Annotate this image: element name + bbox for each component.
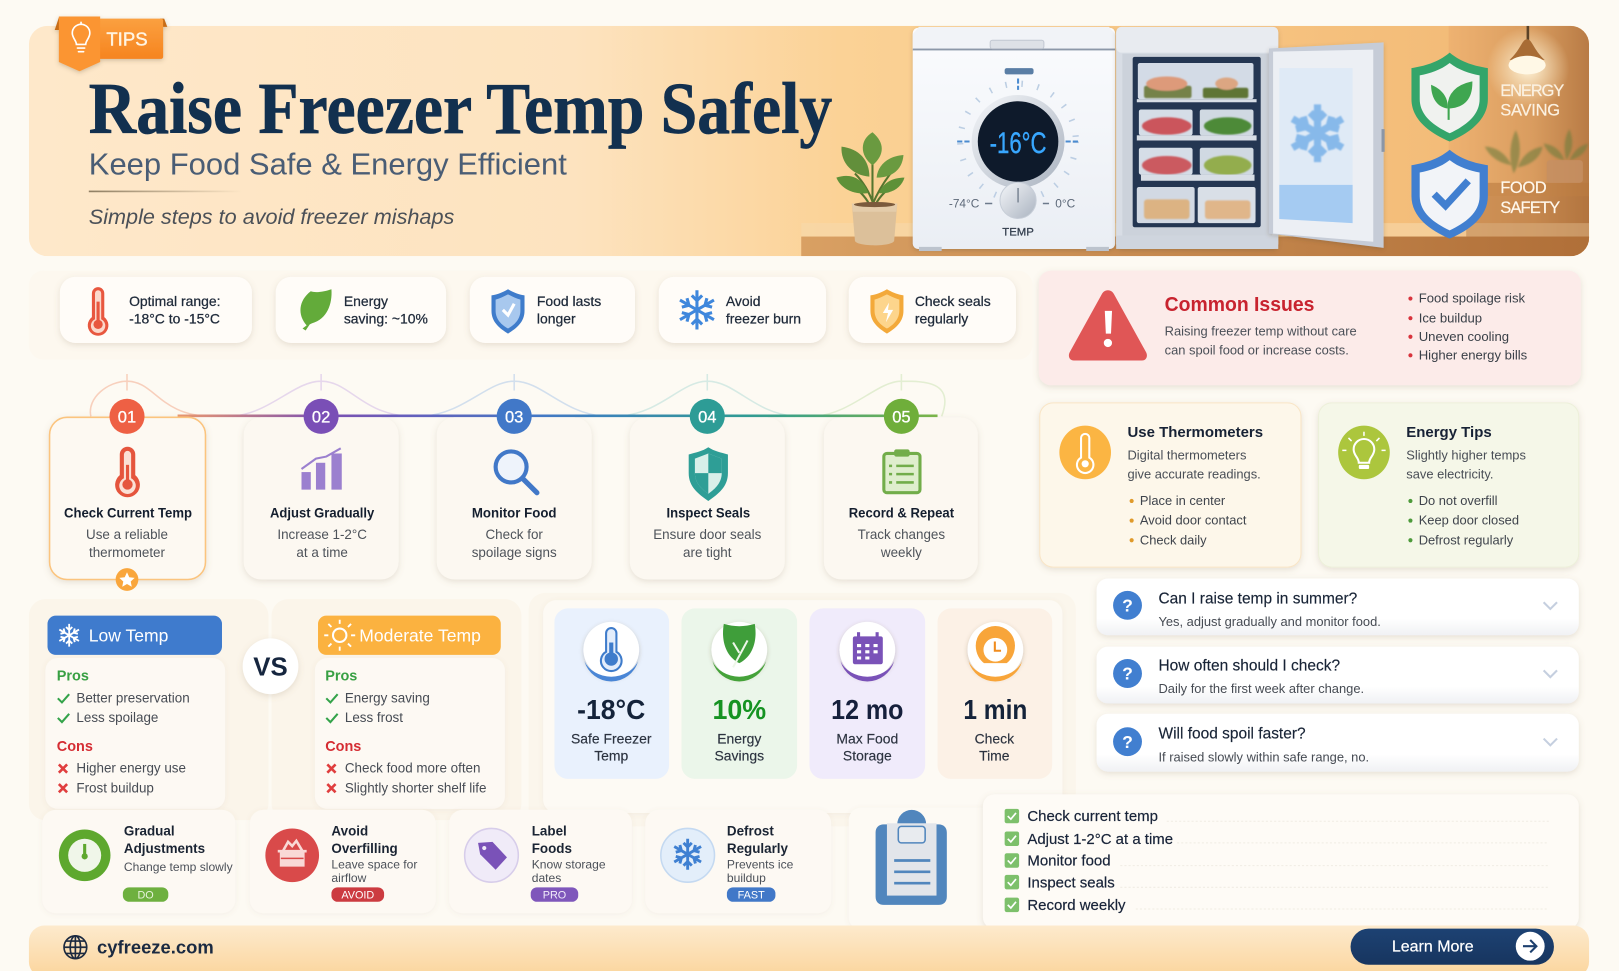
star badge — [116, 568, 138, 591]
fact: optimal range — [60, 277, 252, 343]
temp label: TEMP — [1002, 227, 1034, 239]
tagline: Simple steps to avoid freezer mishaps — [89, 204, 454, 229]
energy saving badge: SAVING — [1500, 101, 1560, 120]
step text: Inspect Seals — [666, 505, 750, 521]
stat value: 10% — [712, 694, 766, 725]
panel: checklist clipboard — [849, 808, 993, 930]
step 1 card: thermometer — [89, 545, 166, 560]
vs badge: VS — [253, 654, 288, 682]
shelf 3 — [1139, 148, 1193, 175]
icon: magnifier — [496, 451, 537, 493]
food safety label: FOOD — [1500, 178, 1547, 197]
step number: 02 — [312, 407, 330, 426]
tips ribbon badge — [55, 17, 167, 71]
panel: low vs moderate comparison — [29, 599, 521, 820]
shelf 4 — [1137, 187, 1195, 223]
low temp header — [47, 616, 222, 655]
energy saving badge — [1411, 53, 1564, 142]
stat: safe freezer temp — [554, 608, 669, 779]
issues description: Raising freezer temp without care — [1165, 324, 1357, 339]
stat label: Safe Freezer — [571, 731, 652, 747]
timeline curves — [90, 374, 945, 416]
icon: blue shield — [491, 289, 525, 334]
stat: max food storage — [810, 608, 925, 779]
card heading: Energy Tips — [1406, 424, 1492, 441]
step number: 01 — [118, 407, 136, 426]
step text: Monitor Food — [472, 505, 557, 521]
step text: Adjust Gradually — [270, 505, 375, 521]
issues description: can spoil food or increase costs. — [1165, 342, 1349, 357]
icon: arrow — [1516, 932, 1545, 961]
tag: fast — [727, 887, 775, 902]
moderate temp pros and cons: Slightly shorter shelf life — [345, 780, 486, 795]
step 5 card: weekly — [880, 545, 922, 560]
icon: light bulb circle — [1338, 426, 1390, 479]
moderate temp pros and cons: Energy saving — [345, 690, 430, 705]
card description: give accurate readings. — [1128, 466, 1261, 481]
tip: defrost regularly: Defrost — [727, 824, 774, 839]
faq item 1: ? — [1122, 596, 1133, 616]
moderate temp header: Moderate Temp — [359, 625, 481, 645]
stat label: Max Food — [836, 731, 898, 747]
issues heading: Common Issues — [1165, 293, 1314, 316]
panel: faq — [1097, 578, 1579, 772]
step 3 card: Check for — [486, 527, 543, 542]
icon: globe — [64, 936, 87, 959]
learn more button: Learn More — [1392, 938, 1474, 955]
panel: common issues — [1039, 271, 1581, 385]
shelf 1 — [1138, 63, 1253, 99]
faq item 3: Will food spoil faster? — [1158, 726, 1306, 743]
tip: avoid overfilling: airflow — [331, 871, 367, 885]
icon: basket — [265, 828, 319, 882]
tag: avoid: AVOID — [341, 890, 374, 902]
step 5 card — [824, 399, 978, 580]
step number — [690, 399, 725, 434]
vs badge — [243, 638, 298, 694]
step number: 04 — [698, 407, 716, 426]
faq item 2: How often should I check? — [1158, 657, 1340, 674]
dial ticks — [960, 84, 1076, 199]
moderate temp pros and cons: Pros — [325, 669, 357, 685]
faq item 1: Yes, adjust gradually and monitor food. — [1158, 614, 1381, 629]
faq item 2: ? — [1122, 664, 1133, 684]
tag: fast: FAST — [738, 890, 765, 902]
step 1 card — [50, 399, 205, 591]
stat value: -18°C — [577, 694, 645, 725]
tag: avoid — [331, 887, 384, 902]
fact: food lasts — [470, 277, 635, 343]
stat label: Temp — [594, 747, 629, 763]
step 2 card — [244, 399, 399, 580]
checklist items: Inspect seals — [1027, 874, 1115, 891]
icon: sun — [324, 620, 355, 651]
door snowflake — [1289, 104, 1346, 162]
tip: avoid overfilling: Leave space for — [331, 858, 417, 872]
moderate temp pros and cons: Check food more often — [345, 761, 480, 776]
faq item 1: Can I raise temp in summer? — [1158, 590, 1358, 607]
icon: leaf — [711, 622, 767, 681]
step 2 card: Increase 1-2°C — [277, 527, 367, 542]
icon: teal shield — [689, 447, 728, 501]
icon: green clipboard — [884, 449, 920, 493]
tip: avoid overfilling: Avoid — [331, 824, 368, 839]
energy saving label: ENERGY — [1500, 81, 1564, 100]
issues list: Higher energy bills — [1419, 347, 1528, 362]
panel: footer — [29, 926, 1589, 971]
issues list: Ice buildup — [1419, 310, 1482, 325]
icon: snowflake — [677, 290, 717, 330]
tip: gradual adjustments — [42, 810, 235, 913]
fact text: longer — [537, 310, 576, 326]
plant — [836, 132, 904, 245]
tag: do: DO — [137, 890, 154, 902]
low temp pros and cons: Cons — [57, 739, 93, 755]
stat label: Savings — [714, 747, 764, 763]
tip: defrost regularly: buildup — [727, 871, 766, 885]
tip: label foods: dates — [532, 871, 561, 885]
stat label: Energy — [717, 731, 761, 747]
tag: do — [123, 887, 168, 902]
tip: gradual adjustments: Gradual — [124, 824, 175, 839]
fact text: Check seals — [915, 293, 991, 309]
low temp pros and cons: Better preservation — [76, 690, 190, 705]
chest freezer with dial — [913, 27, 1115, 251]
icon: gauge — [59, 829, 110, 881]
card heading: Use Thermometers — [1128, 424, 1263, 441]
low temp pros and cons: Pros — [57, 669, 89, 685]
icon: blue check shield — [1411, 150, 1488, 239]
step 5 card: Track changes — [858, 527, 945, 542]
faq item 2 — [1097, 647, 1579, 703]
icon: tag — [465, 828, 518, 882]
card list: Defrost regularly — [1419, 532, 1514, 547]
step 1 card: Use a reliable — [86, 527, 168, 542]
fact text: Avoid — [726, 293, 760, 309]
tip: defrost regularly — [645, 810, 831, 913]
tip: label foods: Foods — [532, 841, 572, 856]
fact text: saving: ~10% — [344, 310, 428, 326]
moderate temp pros and cons: Cons — [325, 739, 361, 755]
tip: label foods: Label — [532, 824, 567, 839]
fact text: regularly — [915, 310, 968, 326]
icon: leaf — [300, 289, 332, 331]
issues list — [1408, 291, 1528, 362]
fact: energy saving — [276, 277, 446, 343]
fact: avoid freezer burn — [659, 277, 826, 343]
icon: snowflake — [58, 624, 81, 647]
icon: clipboard — [876, 810, 947, 905]
card list: Check daily — [1140, 532, 1207, 547]
icon: snowflake — [661, 828, 715, 882]
tip: defrost regularly: Prevents ice — [727, 858, 794, 872]
step number — [497, 399, 532, 434]
food safety badge: SAFETY — [1500, 198, 1560, 217]
panel: checklist — [983, 794, 1579, 929]
icon: light bulb — [72, 22, 90, 52]
fact text: freezer burn — [726, 310, 801, 326]
faq item 2: Daily for the first week after change. — [1158, 681, 1364, 696]
stat value: 1 min — [963, 694, 1027, 725]
card list: Place in center — [1140, 493, 1226, 508]
low temp pros and cons: Higher energy use — [76, 761, 186, 776]
low temp pros and cons — [45, 658, 225, 809]
card list: Avoid door contact — [1140, 513, 1247, 528]
icon: thermometer — [115, 447, 140, 497]
card list — [1408, 493, 1519, 547]
checklist items: Record weekly — [1027, 897, 1126, 914]
step number — [884, 399, 919, 434]
faq item 1 — [1097, 578, 1579, 635]
step 3 card: spoilage signs — [472, 545, 557, 560]
issues list: Uneven cooling — [1419, 329, 1509, 344]
panel: thermometer advice — [1040, 403, 1301, 567]
open freezer with food — [1116, 27, 1385, 249]
faq item 3: ? — [1122, 732, 1133, 752]
icon: thermometer — [88, 287, 108, 336]
icon: green leaf shield — [1411, 53, 1488, 142]
fact text: Food lasts — [537, 293, 601, 309]
learn more button — [1351, 929, 1554, 965]
step 3 card — [437, 399, 592, 580]
shelf 2 — [1139, 109, 1193, 135]
card description: Slightly higher temps — [1406, 448, 1526, 463]
moderate temp pros and cons — [315, 658, 505, 809]
panel: hero banner — [29, 17, 1590, 256]
panel: quick tips — [42, 810, 831, 913]
faq item 3 — [1097, 714, 1579, 772]
panel: five step timeline — [50, 374, 978, 591]
tip: label foods — [449, 810, 632, 913]
fact text: Energy — [344, 293, 388, 309]
checklist items: Check current temp — [1027, 808, 1158, 825]
moderate temp pros and cons: Less frost — [345, 710, 403, 725]
stat value: 12 mo — [831, 694, 903, 725]
knob — [1000, 182, 1036, 218]
tip: avoid overfilling — [250, 810, 436, 913]
step number: 03 — [505, 407, 523, 426]
low temp header: Low Temp — [89, 625, 169, 645]
hero background — [29, 26, 1590, 256]
stat label: Storage — [843, 747, 892, 763]
stat label: Check — [975, 731, 1014, 747]
icon: thermometer circle — [1059, 426, 1111, 479]
temperature reading: -16°C — [990, 127, 1046, 160]
tip: gradual adjustments: Change temp slowly — [124, 860, 234, 874]
checklist items: Adjust 1-2°C at a time — [1027, 831, 1173, 848]
checklist items: Monitor food — [1027, 853, 1111, 870]
step text: Record & Repeat — [849, 505, 954, 521]
website: cyfreeze.com — [97, 936, 214, 957]
fact text: -18°C to -15°C — [129, 310, 220, 326]
stat: check time — [938, 608, 1052, 779]
tips label: TIPS — [106, 28, 148, 49]
tip: label foods: Know storage — [532, 858, 606, 872]
card description: Digital thermometers — [1128, 448, 1246, 463]
low temp pros and cons: Less spoilage — [76, 710, 158, 725]
step number — [109, 399, 145, 434]
checklist items — [1005, 808, 1173, 914]
open door — [1269, 42, 1384, 248]
stat: energy savings — [681, 608, 797, 779]
food safety badge — [1411, 150, 1560, 239]
step 4 card: are tight — [683, 545, 732, 560]
step number: 05 — [892, 407, 911, 426]
tip: gradual adjustments: Adjustments — [124, 841, 205, 856]
step 4 card: Ensure door seals — [653, 527, 762, 542]
tag: pro — [531, 887, 578, 902]
range labels: -74°C — [949, 197, 980, 211]
dial display — [972, 95, 1065, 188]
card description: save electricity. — [1406, 466, 1493, 481]
subtitle rule — [89, 191, 242, 192]
range labels: 0°C — [1055, 197, 1076, 211]
moderate temp header — [318, 616, 501, 655]
panel: energy tips — [1319, 403, 1579, 567]
fact text: Optimal range: — [129, 293, 220, 309]
card list — [1130, 493, 1247, 547]
tip: defrost regularly: Regularly — [727, 841, 789, 856]
icon: rising bars — [301, 448, 342, 490]
panel: key facts — [29, 271, 1033, 359]
tag: pro: PRO — [543, 890, 566, 902]
step 4 card — [630, 399, 785, 580]
title: Raise Freezer Temp Safely — [89, 68, 832, 149]
issues list: Food spoilage risk — [1419, 291, 1525, 306]
icon: clock — [967, 622, 1023, 681]
icon: gold shield — [870, 289, 903, 334]
icon: thermometer — [583, 622, 639, 681]
subtitle: Keep Food Safe & Energy Efficient — [89, 147, 567, 182]
step number — [304, 399, 339, 434]
icon: warning triangle — [1069, 290, 1147, 361]
icon: calendar — [839, 622, 895, 681]
stat label: Time — [979, 747, 1010, 763]
step text: Check Current Temp — [64, 505, 192, 521]
tip: avoid overfilling: Overfilling — [331, 841, 398, 856]
range labels — [949, 197, 1076, 211]
card list: Keep door closed — [1419, 513, 1519, 528]
card list: Do not overfill — [1419, 493, 1497, 508]
low temp pros and cons: Frost buildup — [76, 780, 154, 795]
panel: key stats — [529, 593, 1076, 826]
fact: check seals — [849, 277, 1016, 343]
step 2 card: at a time — [296, 545, 348, 560]
faq item 3: If raised slowly within safe range, no. — [1158, 749, 1369, 764]
